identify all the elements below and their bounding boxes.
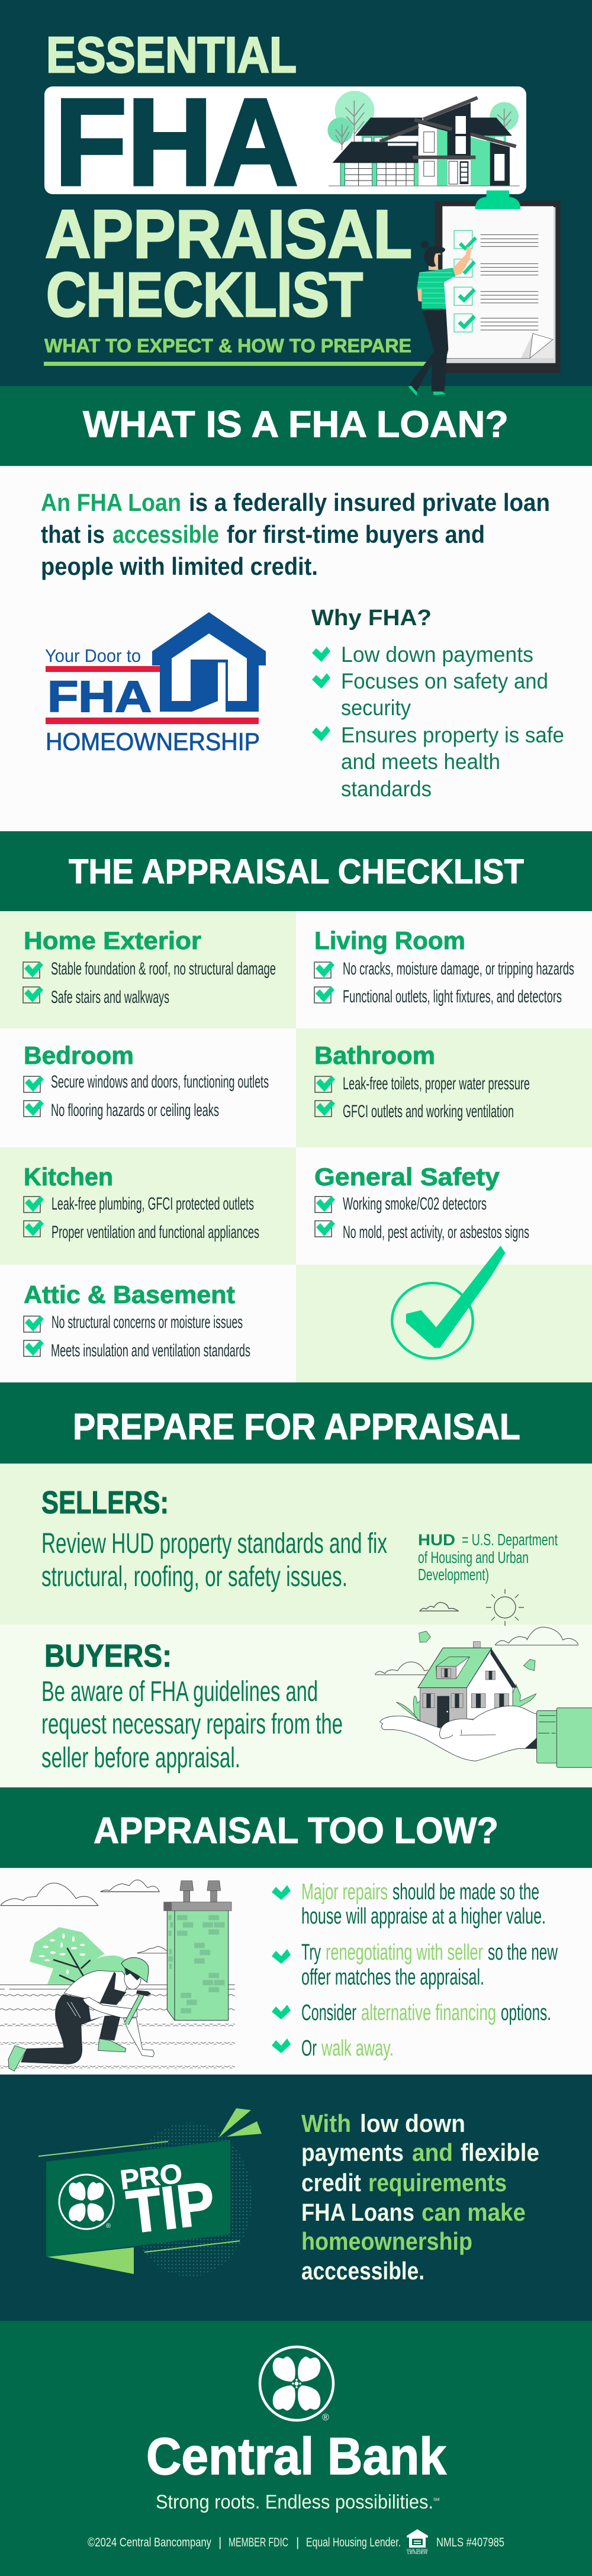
panel: general safety: General Safety	[314, 1163, 500, 1191]
title: Checklist: CHECKLIST	[46, 260, 363, 330]
icon: equal housing lender: EQUAL HOUSING	[407, 2549, 428, 2552]
text block: pro tip message	[301, 2109, 539, 2285]
legal line: MEMBER FDIC	[229, 2536, 288, 2549]
title: Essential: ESSENTIAL	[46, 27, 297, 83]
text block: pro tip message: credit	[301, 2169, 361, 2196]
logo: FHA homeownership	[45, 612, 266, 755]
title card: FHA: FHA	[54, 73, 298, 211]
logo: FHA homeownership: FHA	[47, 672, 152, 721]
text block: pro tip message: payments	[301, 2138, 404, 2166]
panel: appraisal too low header	[0, 1787, 592, 1868]
panel: home exterior: Safe stairs and walkways	[51, 988, 169, 1007]
illustration: clipboard checklist and person	[408, 191, 561, 395]
panel: appraisal too low header: APPRAISAL TOO LOW?	[94, 1810, 498, 1851]
intro paragraph: accessible	[112, 520, 219, 548]
item: major repairs	[272, 1880, 546, 1929]
badge: pro tip	[38, 2108, 262, 2276]
heading: why FHA: Why FHA?	[311, 606, 432, 631]
panel: sellers: SELLERS:	[41, 1485, 169, 1520]
item: alternative financing: Consider	[301, 2001, 356, 2025]
text block: pro tip message: requirements	[368, 2169, 507, 2196]
legal line: ©2024 Central Bancompany	[88, 2536, 211, 2549]
badge: pro tip: ®	[106, 2223, 111, 2230]
panel: what is a FHA loan header: WHAT IS A FHA LOAN?	[83, 404, 509, 445]
list: why FHA reasons	[312, 642, 564, 801]
panel: home exterior: Stable foundation & roof, no structural damage	[51, 959, 276, 979]
panel: buyers: Be aware of FHA guidelines and	[41, 1676, 318, 1707]
panel: sellers	[0, 1464, 592, 1625]
badge: pro tip: PRO	[118, 2157, 184, 2195]
text block: pro tip message: low down	[360, 2109, 465, 2137]
panel: big check background	[296, 1265, 592, 1382]
illustration: house held in a hand	[375, 1627, 592, 1767]
item: major repairs: Major repairs	[301, 1880, 388, 1905]
title: Appraisal: APPRAISAL	[45, 197, 412, 272]
panel: home exterior	[0, 911, 296, 1028]
list: why FHA reasons: standards	[341, 777, 432, 801]
title card: FHA	[44, 73, 526, 211]
note: HUD definition	[418, 1530, 558, 1584]
panel: kitchen: Proper ventilation and functional appliances	[52, 1223, 259, 1242]
panel: prepare for appraisal header	[0, 1382, 592, 1464]
panel: buyers: BUYERS:	[44, 1638, 172, 1674]
logo: Central Bank flower: ®	[322, 2413, 329, 2423]
intro paragraph: An FHA Loan	[41, 488, 181, 516]
item: walk away: walk away.	[321, 2036, 394, 2061]
icon: large brush checkmark in circle	[392, 1246, 506, 1358]
subtitle underline	[44, 362, 427, 366]
text block: pro tip message: acccessible.	[301, 2257, 424, 2285]
panel: attic and basement: Meets insulation and ventilation standards	[51, 1341, 250, 1361]
panel: general safety: Working smoke/C02 detectors	[343, 1194, 487, 1214]
tagline service mark: SM	[433, 2498, 440, 2502]
subtitle: WHAT TO EXPECT & HOW TO PREPARE	[44, 335, 411, 356]
item: renegotiating: Try	[301, 1940, 321, 1965]
intro paragraph	[41, 488, 550, 580]
panel: prepare for appraisal header: PREPARE FOR APPRAISAL	[73, 1407, 520, 1448]
intro paragraph: is a federally insured private loan	[189, 488, 550, 516]
item: renegotiating: renegotiating with seller	[326, 1940, 483, 1965]
item: alternative financing	[272, 2001, 551, 2025]
panel: home exterior: Home Exterior	[24, 927, 201, 954]
illustration: modern house with trees	[327, 91, 520, 186]
illustration: sun and small cloud	[420, 1589, 524, 1626]
list: low appraisal options	[272, 1880, 558, 2061]
panel: bedroom	[0, 1028, 296, 1147]
note: HUD definition: Development)	[418, 1565, 489, 1584]
panel: attic and basement: No structural concerns or moisture issues	[52, 1313, 243, 1332]
panel: appraisal too low body	[0, 1868, 592, 2075]
panel: what is a FHA loan body	[0, 466, 592, 831]
panel: sellers: structural, roofing, or safety issues.	[41, 1561, 348, 1593]
panel: buyers	[0, 1625, 592, 1787]
text block: pro tip message: FHA Loans	[301, 2198, 414, 2226]
panel: attic and basement	[0, 1265, 296, 1382]
panel: what is a FHA loan header	[0, 386, 592, 466]
panel: bathroom: Bathroom	[314, 1041, 435, 1069]
logo: FHA homeownership: Your Door to	[45, 645, 141, 666]
list: why FHA reasons: security	[341, 696, 411, 720]
text block: pro tip message: can make	[422, 2198, 526, 2226]
intro paragraph: for first-time buyers and	[227, 520, 485, 548]
text block: pro tip message: homeownership	[301, 2227, 472, 2255]
list: why FHA reasons: Low down payments	[341, 642, 533, 667]
panel: bedroom: Secure windows and doors, functioning outlets	[51, 1072, 269, 1092]
panel: footer	[0, 2321, 592, 2576]
panel: sellers: Review HUD property standards and fix	[41, 1528, 387, 1559]
item: renegotiating: offer matches the appraisal.	[301, 1965, 484, 1990]
brand name: Central Bank	[146, 2427, 447, 2485]
logo: Central Bank flower	[260, 2347, 333, 2423]
panel: general safety	[296, 1147, 592, 1265]
item: renegotiating	[272, 1940, 558, 1990]
logo: FHA homeownership: HOMEOWNERSHIP	[46, 728, 260, 755]
note: HUD definition: HUD	[418, 1531, 455, 1549]
panel: bedroom: No flooring hazards or ceiling leaks	[51, 1101, 219, 1120]
intro paragraph: that is	[41, 520, 105, 548]
icon: equal housing lender	[407, 2529, 428, 2555]
panel: bedroom: Bedroom	[24, 1041, 134, 1069]
item: walk away	[272, 2036, 394, 2061]
panel: kitchen: Leak-free plumbing, GFCI protected outlets	[52, 1194, 254, 1214]
legal line: |	[296, 2536, 299, 2549]
panel: buyers: request necessary repairs from the	[41, 1709, 343, 1740]
list: why FHA reasons: and meets health	[341, 750, 500, 774]
panel: attic and basement: Attic & Basement	[24, 1281, 235, 1308]
note: HUD definition: of Housing and Urban	[418, 1548, 529, 1567]
legal line: |	[218, 2536, 221, 2549]
item: alternative financing: alternative financing	[361, 2001, 496, 2025]
tagline: Strong roots. Endless possibilities.	[156, 2491, 433, 2513]
illustration: roofer with hammer and chimney	[0, 1880, 235, 2071]
legal line	[88, 2536, 504, 2549]
item: walk away: Or	[301, 2036, 317, 2061]
list: why FHA reasons: Ensures property is safe	[341, 723, 564, 747]
panel: buyers: seller before appraisal.	[41, 1742, 240, 1774]
panel: living room	[296, 911, 592, 1028]
panel: appraisal checklist header: THE APPRAISAL CHECKLIST	[69, 853, 524, 891]
intro paragraph: people with limited credit.	[41, 552, 318, 580]
legal line: Equal Housing Lender.	[306, 2536, 401, 2549]
panel: bathroom	[296, 1028, 592, 1147]
panel: living room: Living Room	[314, 927, 465, 954]
item: alternative financing: options.	[501, 2001, 551, 2025]
panel: pro tip background	[0, 2075, 592, 2321]
badge: pro tip: TIP	[123, 2169, 218, 2246]
text block: pro tip message: flexible	[461, 2138, 539, 2166]
panel: header background	[0, 0, 592, 386]
icon: equal housing lender: LENDER	[407, 2551, 427, 2555]
list: why FHA reasons: Focuses on safety and	[341, 669, 548, 693]
panel: kitchen	[0, 1147, 296, 1265]
panel: appraisal checklist header	[0, 831, 592, 911]
panel: kitchen: Kitchen	[24, 1163, 113, 1191]
text block: pro tip message: and	[412, 2138, 453, 2166]
text block: pro tip message: With	[301, 2109, 351, 2137]
legal line: NMLS #407985	[436, 2536, 504, 2549]
